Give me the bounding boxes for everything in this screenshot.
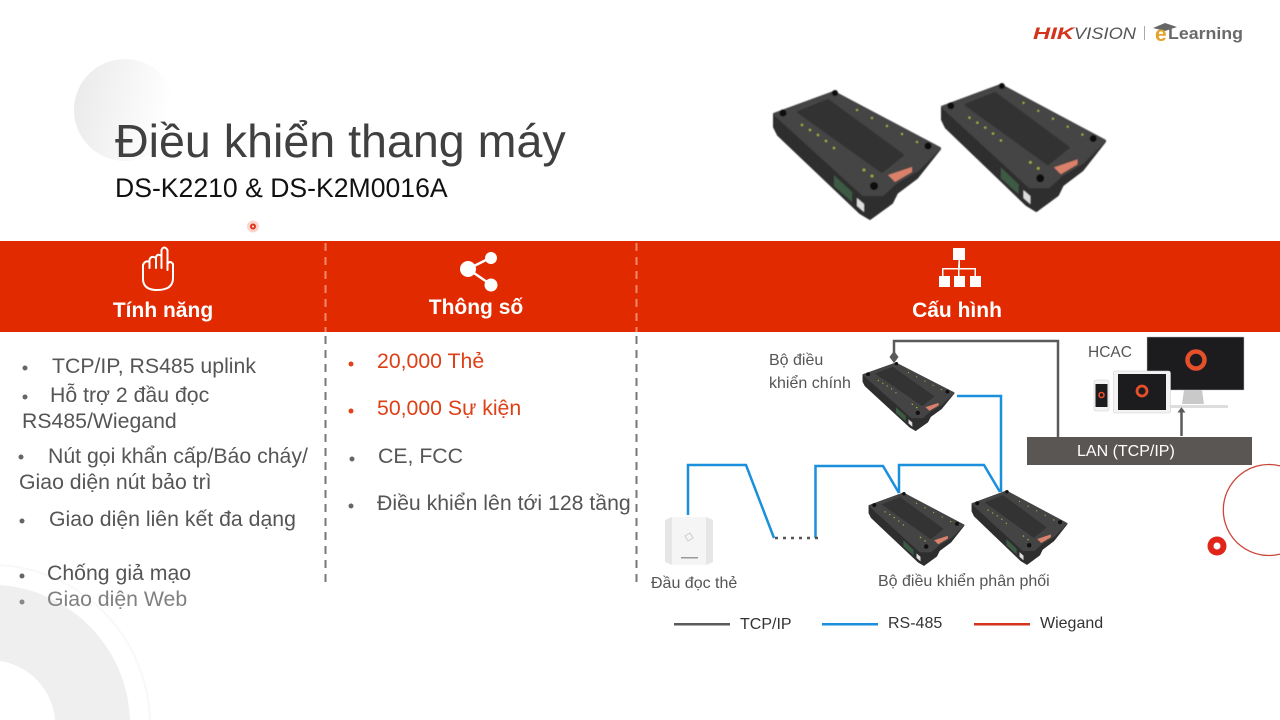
panel: features list <box>18 354 308 611</box>
column dividers <box>326 243 636 588</box>
label: HCAC: HCAC <box>1088 344 1132 361</box>
label: main controller <box>769 352 851 392</box>
logo: Hikvision eLearning <box>1033 23 1243 46</box>
legend: RS-485 <box>888 615 942 632</box>
icon: hierarchy <box>939 248 981 287</box>
panel: features list: Chống giả mạo <box>47 561 191 585</box>
panel: features list: Giao diện nút bảo trì <box>19 470 212 494</box>
icon: phone <box>1094 380 1109 411</box>
icon: tablet <box>1114 371 1170 413</box>
product photo: controller 1 <box>774 90 940 219</box>
LAN box: LAN (TCP/IP) <box>1077 443 1175 460</box>
heading: Cấu hình: Cấu hình <box>912 299 1002 322</box>
label: main controller: khiển chính <box>769 374 851 392</box>
dotted continuation <box>775 537 818 539</box>
panel: configuration diagram <box>651 337 1252 592</box>
product photo: controller 2 <box>942 83 1105 211</box>
logo: Hikvision eLearning: Learning <box>1168 24 1243 43</box>
distributed controller 2 <box>972 490 1067 564</box>
icon: share <box>460 252 498 292</box>
panel: specifications list: CE, FCC <box>378 444 463 468</box>
RS-485 wiring <box>688 396 1001 538</box>
legend <box>674 615 1103 633</box>
panel: features list: Giao diện liên kết đa dạng <box>49 507 296 531</box>
heading: Tính năng: Tính năng <box>113 299 213 322</box>
panel: specifications list: 20,000 Thẻ <box>377 349 484 373</box>
panel: features list: Hỗ trợ 2 đầu đọc <box>50 382 210 407</box>
decorative red ring <box>1223 464 1280 556</box>
LAN box <box>1027 437 1252 465</box>
decorative circle top left <box>74 59 176 161</box>
panel: features list: Nút gọi khẩn cấp/Báo cháy/ <box>48 444 308 468</box>
panel: specifications list: Điều khiển lên tới 128 tầng <box>377 491 631 515</box>
panel: specifications list: 50,000 Sự kiện <box>377 396 521 420</box>
TCP/IP link to main controller <box>891 341 1058 437</box>
distributed controller 1 <box>869 492 964 565</box>
panel: features list: TCP/IP, RS485 uplink <box>52 354 256 378</box>
panel: features list: RS485/Wiegand <box>22 409 177 433</box>
main controller <box>863 362 954 430</box>
legend: Wiegand <box>1040 615 1103 632</box>
title: Điều khiển thang máy <box>115 115 566 167</box>
subtitle: DS-K2210 & DS-K2M0016A <box>115 173 448 203</box>
red header band <box>0 241 1280 332</box>
arrow: LAN to devices <box>1178 408 1184 436</box>
label: main controller: Bộ điều <box>769 352 823 369</box>
panel: specifications list <box>348 349 631 515</box>
laser pointer dot <box>247 220 259 232</box>
icon: monitor <box>1147 337 1244 408</box>
decorative red dot <box>1208 536 1226 556</box>
logo: Hikvision eLearning: e <box>1155 23 1167 46</box>
icon: hand <box>143 248 173 290</box>
label: distributed controllers: Bộ điều khiển phân phối <box>878 572 1050 590</box>
logo: Hikvision eLearning: VISION <box>1074 24 1137 43</box>
logo: Hikvision eLearning: HIK <box>1033 24 1076 43</box>
legend: TCP/IP <box>740 616 792 633</box>
decorative rings bottom left <box>0 565 150 720</box>
panel: features list: Giao diện Web <box>47 587 187 611</box>
label: card reader: Đầu đọc thẻ <box>651 575 737 592</box>
icon: card reader <box>665 517 713 565</box>
heading: Thông số: Thông số <box>429 296 523 319</box>
